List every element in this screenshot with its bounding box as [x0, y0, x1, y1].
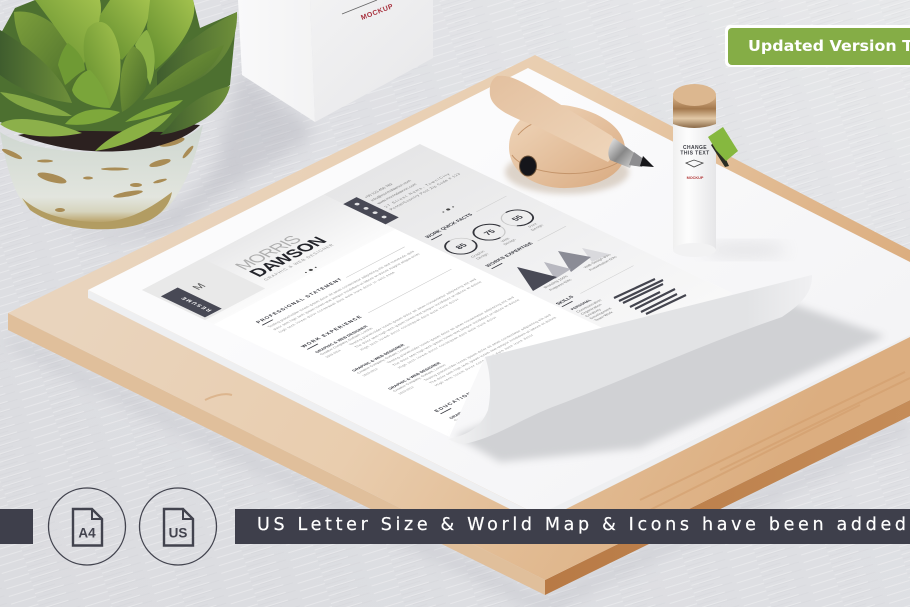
gauge 85: 85 — [453, 242, 470, 250]
contact details: 27 Street Name, Town/City — [383, 173, 451, 208]
work experience: WORK EXPERIENCE — [300, 315, 364, 349]
professional statement: high tech lorem dolor consequat duis aute irure dolor in velit esse — [278, 271, 396, 333]
contact details: Postal/Country Post Zip Code # 123 — [388, 172, 462, 211]
job 2: High tech lorem dolor consequat duis aute irure dolor — [397, 316, 498, 369]
update badge: Updated Version T — [748, 37, 910, 55]
dots — [304, 266, 318, 274]
job 2: Creative Company, Gotham, London — [356, 346, 411, 374]
paper stack — [88, 68, 910, 523]
contact details: info@morrisdawson.com — [369, 179, 413, 202]
works expertise: Branding 100% — [543, 275, 570, 289]
education: Creative Company, London — [453, 400, 495, 422]
education: EDUCATION — [433, 391, 475, 413]
job 3: High tech lorem dolor consequat duis aute irure dolor — [434, 333, 535, 387]
pot base wear — [22, 192, 172, 229]
soil — [18, 118, 200, 152]
skills: Development — [588, 306, 614, 320]
bag right panel — [310, 0, 433, 122]
bottle — [673, 84, 787, 257]
announcement banner — [235, 509, 910, 544]
work quick facts — [421, 195, 556, 263]
gauge 75 — [467, 221, 523, 249]
gauge 75: Web — [499, 236, 512, 243]
board side edge: left — [8, 313, 545, 595]
professional statement: Testing placeholder lorem ipsum dolor sit amet consectetur adipiscing elit sed commodo quis — [267, 250, 416, 328]
job 3: Creative Company, Gotham, London — [392, 364, 447, 392]
job 2: GRAPHIC & WEB DESIGNER — [350, 343, 406, 372]
skills — [555, 264, 670, 323]
icon: A4 document: A4 — [78, 526, 96, 540]
left dark bar — [0, 509, 33, 544]
wooden disc — [505, 105, 629, 194]
job 1: The dolor sem high tech ipsum lorem text tempor incididunt ut labore et dolore — [354, 281, 483, 348]
job 2: Testing placeholder lorem ipsum dolor sit amet consectetur adipiscing elit sed — [386, 296, 515, 364]
sidebar band — [323, 144, 732, 344]
job 1 — [314, 273, 488, 364]
pencil — [490, 76, 654, 168]
contact details: www.morrisdawson.com — [375, 182, 419, 205]
icon: US document — [140, 488, 216, 565]
skills: Creativity — [583, 308, 602, 318]
bag left panel — [238, 0, 315, 122]
job 1: Testing placeholder lorem ipsum dolor sit amet consectetur adipiscing elit sed — [348, 278, 478, 346]
name: GRAPHIC & WEB DESIGNER — [262, 243, 335, 281]
job 2 — [350, 291, 526, 382]
name: MORRIS — [230, 233, 306, 272]
expertise mountain chart — [517, 248, 609, 291]
update badge — [725, 25, 910, 67]
professional statement: PROFESSIONAL STATEMENT — [255, 277, 345, 324]
skills: PERSONAL — [569, 298, 593, 311]
works expertise: Presentation 60% — [588, 255, 619, 271]
resume tag: RESUME — [179, 295, 214, 312]
gauge 55: Design — [529, 223, 545, 231]
monogram box — [142, 258, 265, 320]
skill bars — [614, 279, 686, 314]
works expertise — [484, 224, 624, 295]
gauge 75: 75 — [482, 228, 498, 236]
bottle label: MOCKUP — [687, 176, 704, 180]
gauge 85: Design — [474, 252, 490, 260]
gauge 75: Design — [502, 238, 517, 246]
announcement banner: US Letter Size & World Map & Icons have been added — [257, 515, 906, 535]
skills: Team Work — [592, 311, 614, 322]
job 3: GRAPHIC & WEB DESIGNER — [386, 361, 442, 390]
plant — [0, 0, 237, 229]
gauge 85: Graphic — [469, 250, 486, 258]
curl shadow — [455, 300, 885, 462]
name: DAWSON — [244, 234, 331, 279]
pot chips — [1, 135, 195, 212]
skills: SKILLS — [555, 295, 576, 306]
works expertise: Prepress 60% — [548, 278, 573, 291]
disc hole — [520, 156, 536, 176]
contact tag — [343, 197, 399, 224]
bottle label: CHANGE — [683, 145, 707, 151]
contact details — [363, 160, 462, 211]
job 1: Creative Company, Gotham, London — [319, 327, 374, 356]
education: GRAPHIC & WEB DESIGNER — [448, 391, 503, 420]
cover for the lifted page area — [448, 275, 910, 515]
leaves — [0, 0, 237, 151]
gauge 55 — [495, 207, 550, 234]
education: Testing placeholder lorem ipsum — [477, 390, 528, 416]
icon: A4 document — [48, 488, 126, 565]
skills: Organization — [579, 303, 603, 315]
job 2: 2010-2014 — [361, 368, 379, 377]
bag label: MOCKUP — [360, 3, 395, 22]
job 3: The dolor sem high tech ipsum lorem text tempor incididunt ut labore et dolore — [428, 316, 558, 384]
gauge 85 — [439, 235, 495, 263]
leaf mass — [0, 0, 237, 132]
resume tag — [161, 288, 222, 317]
name — [230, 227, 336, 281]
cork cap — [673, 84, 716, 128]
job 3: 2010-2014 — [397, 386, 415, 395]
work quick facts: WORK QUICK FACTS — [424, 213, 475, 239]
professional statement: dolor sem high tech ipsum lorem text tempor incididunt ut labore et dolore magna aliqua enim — [272, 253, 421, 331]
skills: Communication — [574, 299, 603, 313]
contact details: +00 123 456 789 — [363, 182, 395, 199]
bottle label — [680, 145, 710, 180]
job 3: Testing placeholder lorem ipsum dolor sit amet consectetur adipiscing elit sed — [423, 314, 552, 382]
bottle label: THIS TEXT — [680, 150, 710, 156]
works expertise: Web Design 80% — [583, 253, 613, 269]
stack side — [88, 290, 910, 523]
gauge 55: Print — [527, 222, 539, 228]
works expertise: WORKS EXPERTISE — [484, 241, 536, 268]
resume page — [142, 144, 732, 439]
education — [433, 377, 528, 425]
pot body — [0, 125, 203, 228]
gauge 55: 55 — [510, 214, 526, 222]
header band — [142, 195, 395, 324]
stack top — [88, 68, 910, 515]
job 1: GRAPHIC & WEB DESIGNER — [314, 325, 369, 354]
bag label — [342, 0, 395, 22]
board side edge: right — [545, 400, 910, 595]
job 2: The dolor sem high tech ipsum lorem text tempor incididunt ut labore et dolore — [391, 299, 521, 367]
work experience — [299, 267, 563, 400]
job 1: 2010-2014 — [324, 349, 342, 358]
icon: US document: US — [169, 526, 187, 540]
sidebar dots — [441, 206, 455, 213]
curled page corner — [448, 275, 812, 444]
page sheet — [142, 144, 732, 439]
monogram: M — [190, 282, 209, 292]
paper bag mockup — [238, 0, 433, 122]
job 3 — [386, 309, 563, 400]
job 1: High tech lorem dolor consequat duis aute irure dolor — [359, 298, 461, 351]
green tag — [708, 127, 738, 167]
